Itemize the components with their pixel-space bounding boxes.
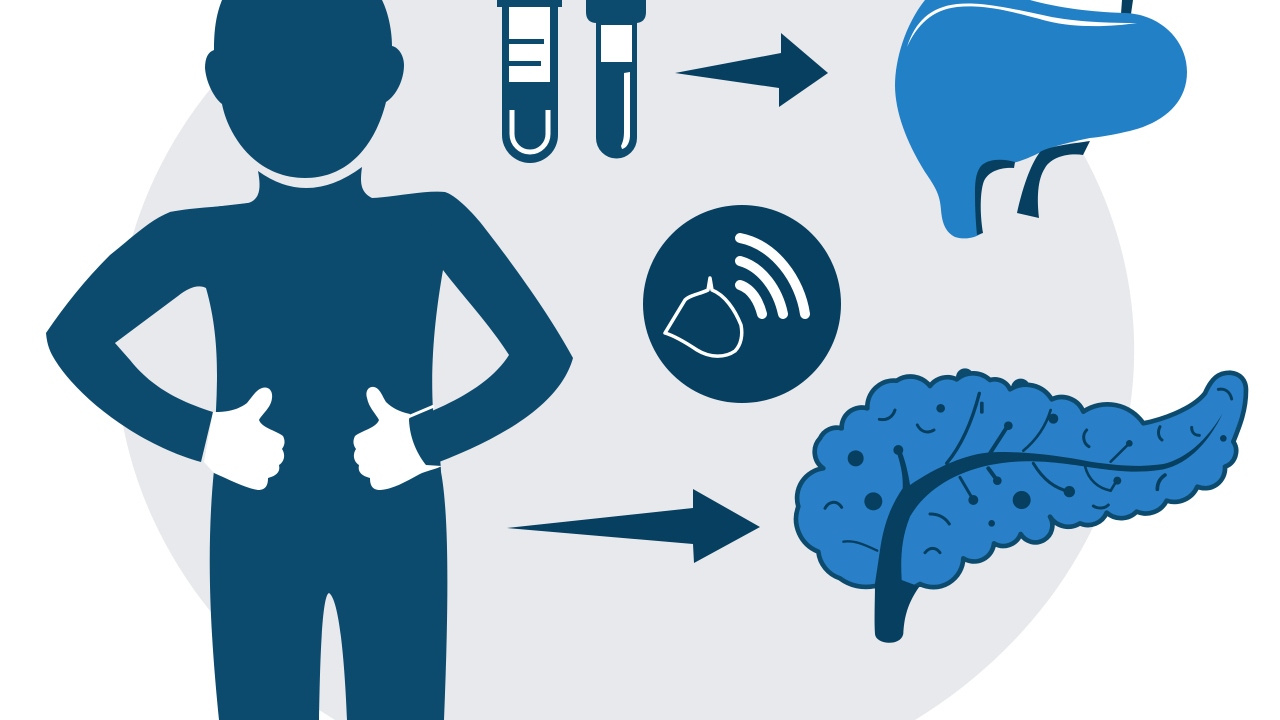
ultrasound icon: [643, 205, 841, 403]
pancreas icon: [796, 368, 1246, 643]
tissue dots: [848, 402, 1227, 527]
duct branches and acini: [843, 393, 1129, 551]
figure torso and legs: [170, 167, 447, 720]
right test tube: [586, 0, 646, 158]
top nodules: [956, 368, 1030, 398]
pancreatic duct: [875, 413, 1223, 643]
human figure: [46, 0, 573, 720]
left vein: [975, 160, 1015, 235]
sound waves: [740, 238, 805, 314]
ultrasound badge: [643, 205, 841, 403]
left hand thumbs up: [204, 387, 285, 490]
figure right arm: [400, 192, 573, 467]
arrow to liver: [675, 33, 828, 107]
right hand thumbs up: [353, 387, 442, 490]
liver icon: [895, 0, 1187, 238]
figure left arm: [46, 203, 260, 462]
background circle: [116, 0, 1134, 720]
blood test tubes: [497, 0, 646, 163]
right vein: [1017, 141, 1090, 218]
liver body: [895, 0, 1187, 238]
pancreas body: [796, 373, 1246, 591]
arrow to pancreas: [507, 489, 760, 563]
liver highlight: [907, 4, 1137, 47]
left test tube: [497, 0, 562, 163]
right cuff gap: [408, 406, 434, 417]
figure head: [205, 0, 404, 178]
top vessel: [1121, 0, 1133, 14]
tissue crescents: [825, 389, 1232, 553]
ultrasound probe: [665, 278, 742, 356]
